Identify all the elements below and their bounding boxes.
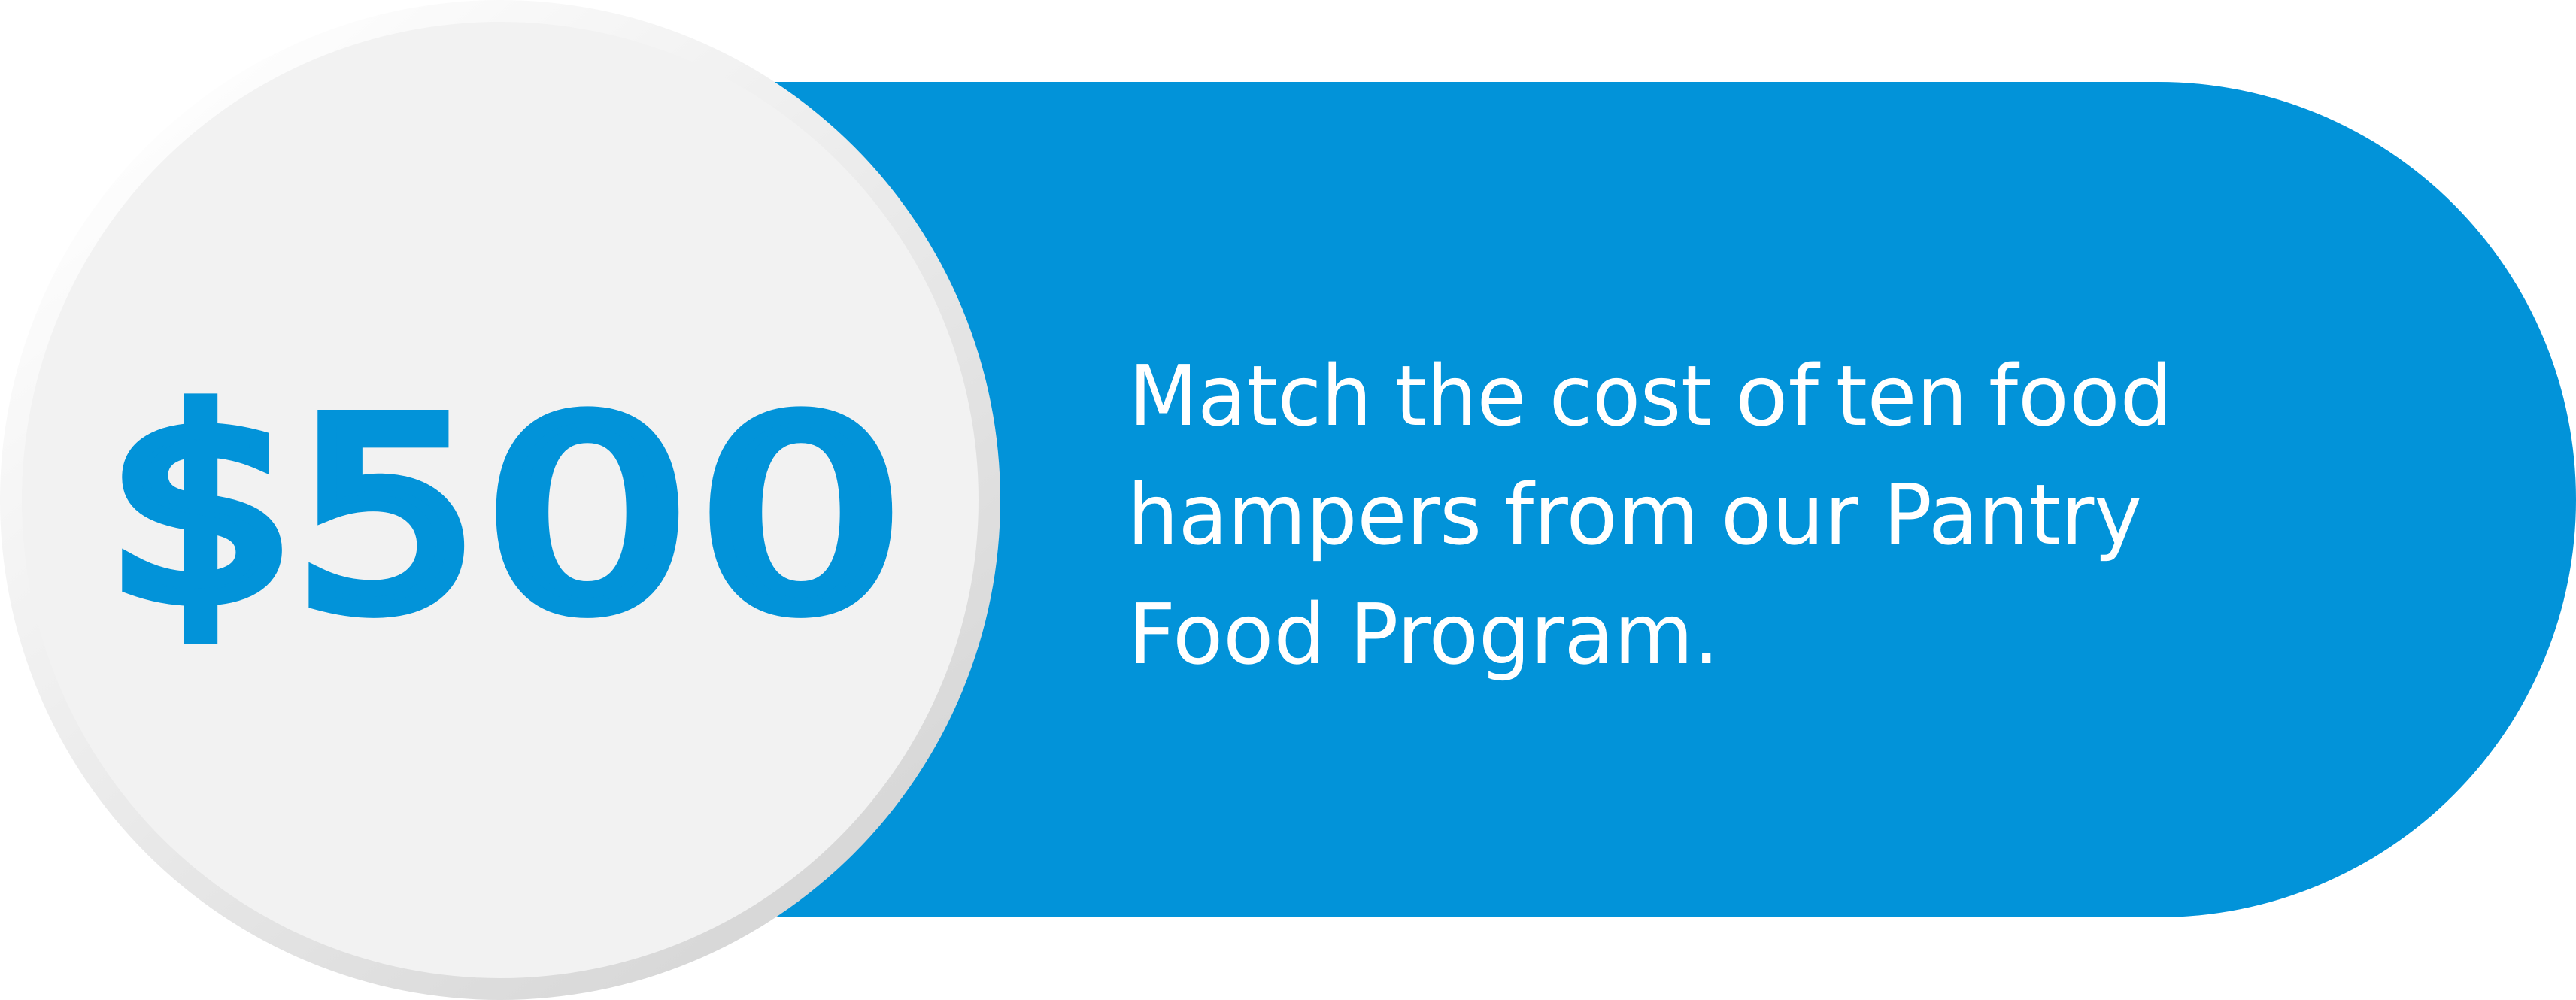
text block: description: hampers bbox=[1127, 467, 1482, 564]
text block: description: of bbox=[1735, 348, 1821, 445]
circle badge inner face bbox=[22, 22, 979, 978]
text block: description: food bbox=[1989, 348, 2173, 445]
text block: description: Program. bbox=[1349, 586, 1719, 683]
text block: description: ten bbox=[1836, 348, 1968, 445]
text block: description: cost bbox=[1549, 348, 1712, 445]
circle badge outer ring bbox=[0, 0, 1000, 1000]
text block: description: from bbox=[1504, 467, 1699, 564]
text block: description: Match bbox=[1129, 348, 1372, 445]
text block: description bbox=[1127, 348, 2173, 683]
text block: description: Food bbox=[1128, 586, 1326, 683]
text block: description: the bbox=[1395, 348, 1526, 445]
text block: description: our bbox=[1721, 467, 1858, 564]
heading: $500 amount: 0 bbox=[699, 367, 903, 667]
heading: $500 amount bbox=[107, 359, 903, 667]
text block: description: Pantry bbox=[1883, 467, 2142, 564]
heading: $500 amount: 0 bbox=[485, 367, 690, 667]
heading: $500 amount: $ bbox=[107, 359, 297, 659]
panel: blue bar with rounded right end bbox=[602, 82, 2576, 917]
heading: $500 amount: 5 bbox=[296, 367, 481, 667]
